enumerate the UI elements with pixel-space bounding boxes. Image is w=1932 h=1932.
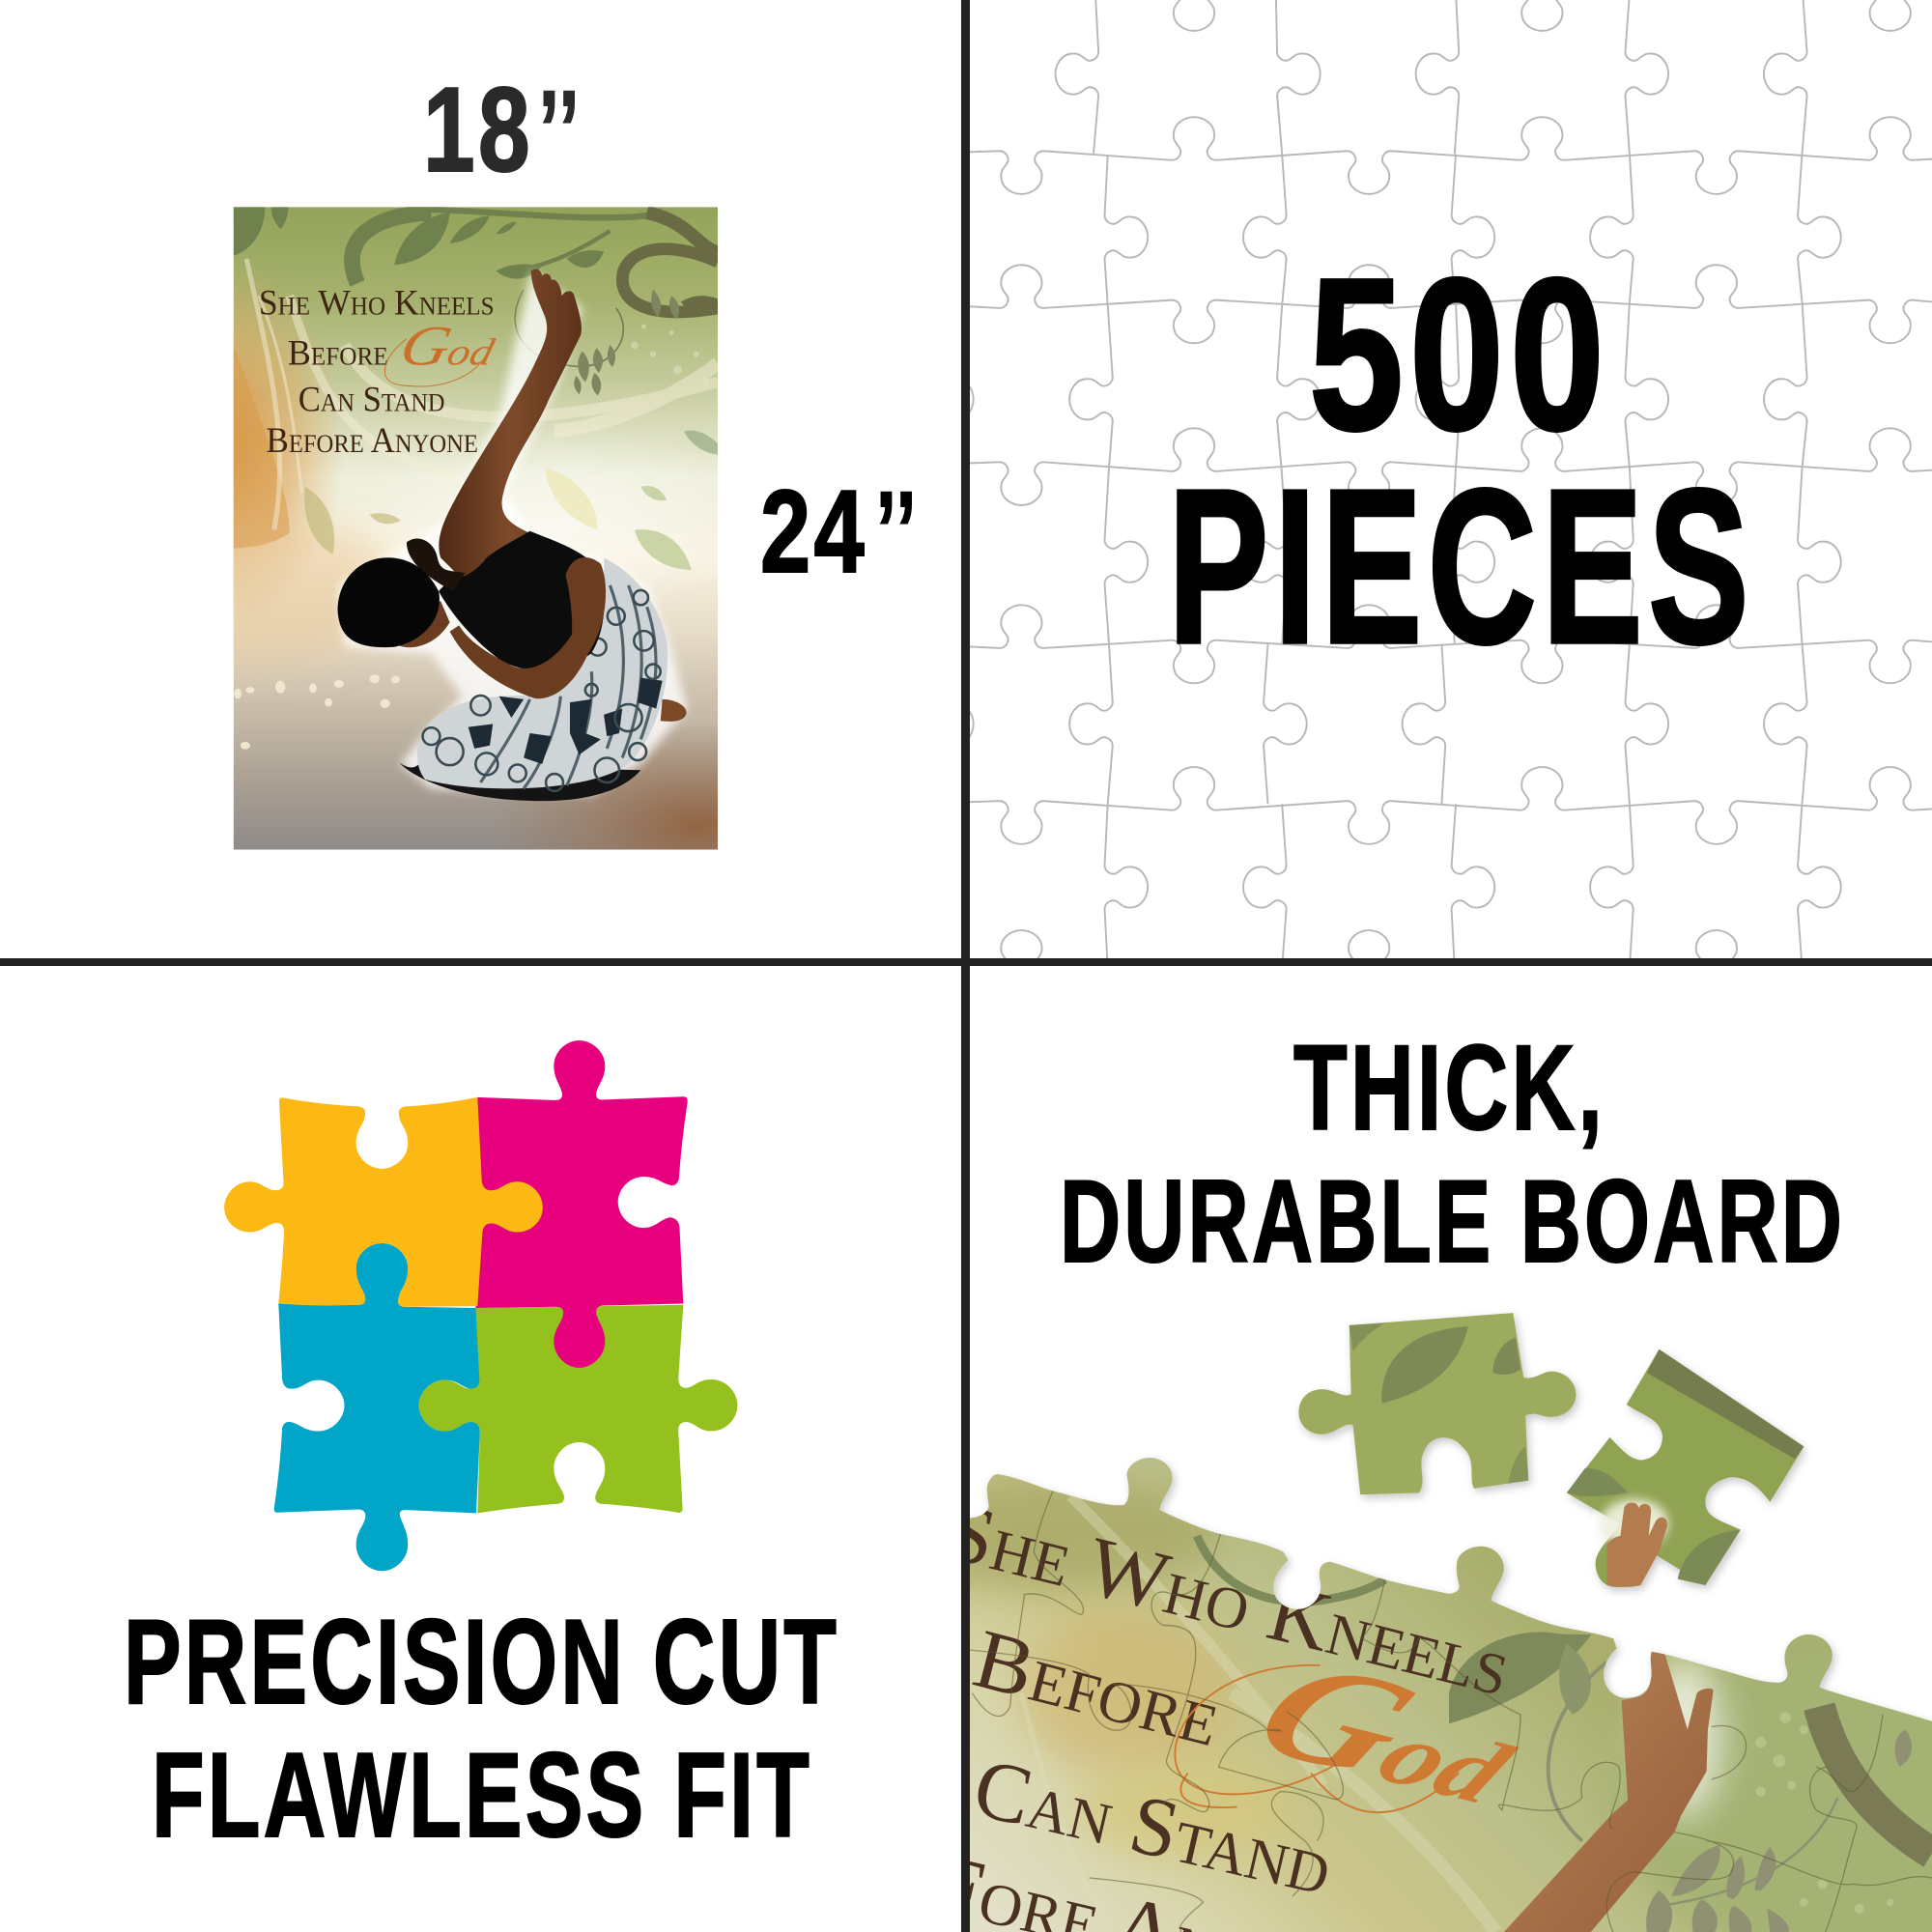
poster figure xyxy=(338,270,687,801)
loose piece: right with fingers xyxy=(1567,1350,1804,1587)
photo: puzzle text: Can Stand xyxy=(966,1740,1341,1913)
panel: precision cut xyxy=(124,1040,839,1862)
heading: 24 inch height: 24 xyxy=(760,466,867,597)
poster text: Before Anyone xyxy=(267,421,478,461)
heading: 24 inch height: ’’ xyxy=(876,469,919,590)
photo: puzzle text xyxy=(970,1511,1520,1932)
heading: 18 inch width: ’’ xyxy=(539,69,582,189)
poster text: Before xyxy=(288,334,388,374)
photo: puzzle text: God xyxy=(1229,1632,1556,1833)
heading: 18 inch width: 18 xyxy=(423,64,533,197)
heading: thick: THICK, xyxy=(1293,1021,1605,1155)
piece: blue xyxy=(274,1243,480,1571)
panel: thick durable board xyxy=(970,1043,1932,1932)
piece: green xyxy=(419,1305,737,1513)
panel: 500 pieces xyxy=(930,0,1932,974)
piece: yellow xyxy=(224,1097,543,1307)
heading: flawless fit: FLAWLESS FIT xyxy=(152,1729,812,1862)
poster text: God xyxy=(394,314,503,377)
poster text xyxy=(261,290,497,452)
poster text: Can Stand xyxy=(298,380,444,419)
poster artwork xyxy=(234,207,719,850)
panel: puzzle poster size xyxy=(234,86,912,850)
photo: puzzle text: She Who Kneels xyxy=(937,1483,1520,1714)
icon: four coloured puzzle pieces xyxy=(224,1040,737,1571)
photo: arm and hand xyxy=(1504,1650,1714,1932)
main assembled puzzle xyxy=(966,1458,1932,1932)
puzzle photo xyxy=(970,1313,1932,1932)
photo: puzzle text: Before xyxy=(965,1611,1230,1764)
jigsaw line grid xyxy=(930,0,1932,974)
piece: magenta xyxy=(475,1040,688,1368)
photo: background swirls xyxy=(855,1477,1932,1932)
poster figure glow xyxy=(339,271,687,795)
heading: precision cut: PRECISION CUT xyxy=(124,1596,839,1729)
photo: cut lines between pieces xyxy=(970,1491,1932,1932)
heading: 500: 500 xyxy=(1309,234,1610,475)
poster text: She Who Kneels xyxy=(259,283,495,323)
loose piece: left xyxy=(1298,1313,1576,1494)
